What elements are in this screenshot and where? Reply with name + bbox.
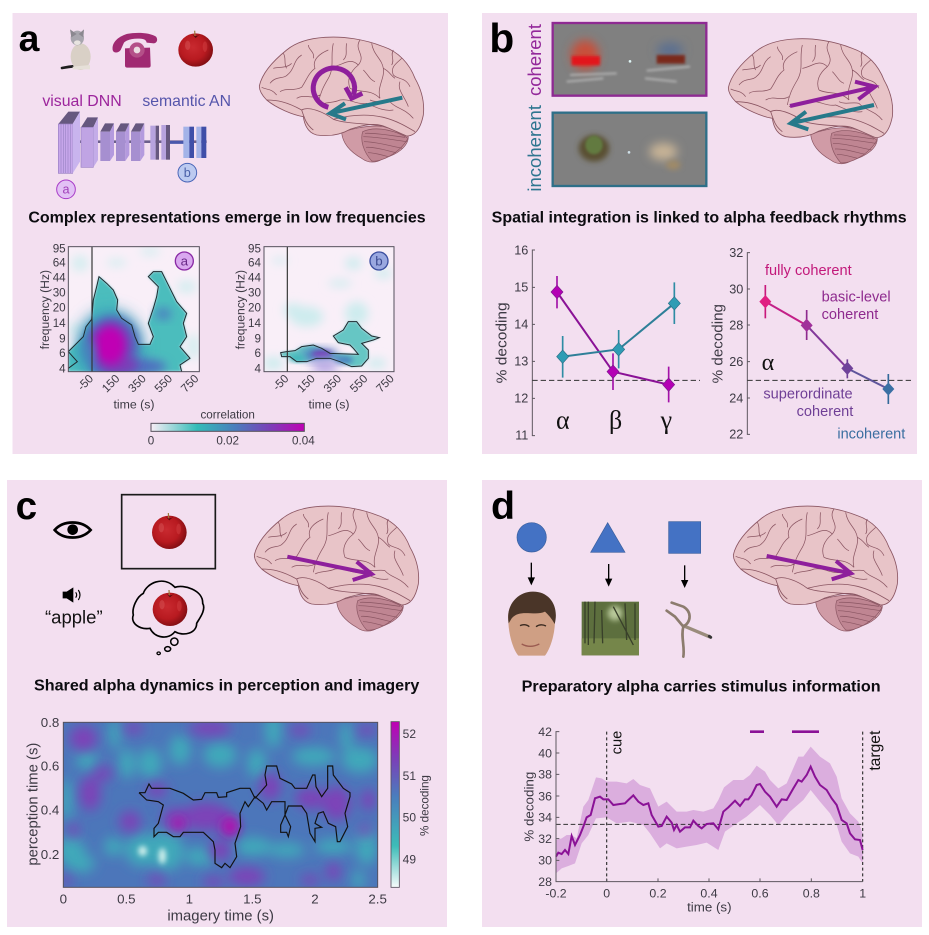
coherent stimulus image: [553, 23, 706, 96]
badge a: [57, 180, 75, 199]
chart: coherence levels: α: [762, 350, 775, 376]
chart: frequency bands: 16: [514, 243, 528, 257]
colorbar: correlation: 0.02: [216, 434, 239, 447]
image: face: [508, 592, 556, 656]
line chart: decoding over time: target: [867, 730, 884, 771]
heatmap b: -50: [270, 372, 292, 393]
colorbar: % decoding: 50: [403, 810, 416, 824]
heatmap: temporal generalization: 0.8: [41, 715, 59, 730]
heatmap b: 750: [374, 372, 397, 395]
label: visual DNN: visual DNN: [42, 93, 122, 110]
brain with arrow: [254, 506, 419, 631]
network diagram: [58, 112, 207, 173]
chart: frequency bands: γ: [660, 405, 672, 434]
panel letter a: a: [19, 17, 40, 59]
colorbar: correlation: [148, 409, 315, 447]
chart: coherence levels: 22: [729, 428, 743, 442]
heatmap b: frequency (Hz): [233, 270, 247, 349]
heatmap b: 64: [248, 257, 262, 270]
line chart: decoding over time: [521, 725, 884, 915]
chart: frequency bands: % decoding: [494, 302, 511, 383]
heatmap a: a: [181, 253, 189, 268]
brain with arrow: [733, 506, 898, 631]
heatmap b: 350: [321, 372, 344, 395]
heatmap a: 750: [179, 372, 202, 395]
heatmap a: 95: [53, 242, 66, 255]
heatmap b: 150: [295, 372, 318, 395]
icon: triangle cue: [591, 523, 625, 552]
heatmap a: time (s): [113, 397, 155, 411]
heatmap: temporal generalization: 0.2: [41, 847, 59, 862]
heatmap a: 9: [59, 332, 66, 345]
heatmap: temporal generalization: 2: [311, 892, 319, 907]
colorbar: % decoding: [391, 722, 431, 887]
icon: eye: [55, 522, 91, 537]
heatmap b: 44: [248, 272, 262, 285]
panel d: preparatory alpha: [482, 480, 922, 927]
chart: frequency bands: 11: [515, 429, 528, 443]
line chart: decoding over time: 30: [538, 854, 552, 868]
chart: coherence levels: fully coherent: [765, 262, 852, 279]
heatmap a: [38, 242, 202, 411]
colorbar: correlation: correlation: [200, 409, 255, 422]
panel letter c: c: [16, 485, 37, 528]
arrows from cues to targets: [528, 563, 688, 588]
shaded error band: [556, 747, 863, 873]
chart: coherence levels: % decoding: [709, 304, 726, 383]
chart: frequency bands: [494, 243, 700, 443]
heatmap: temporal generalization: 0.6: [41, 759, 59, 774]
panel letter d: d: [491, 484, 515, 528]
heading: Shared alpha dynamics in perception and imagery: [34, 678, 419, 695]
chart: coherence levels: 28: [729, 318, 743, 332]
heatmap: temporal generalization: 0: [60, 892, 67, 907]
heatmap b: time (s): [308, 397, 350, 411]
line chart: decoding over time: -0.2: [545, 886, 567, 900]
line chart: decoding over time: cue: [610, 731, 626, 754]
incoherent stimulus image: [553, 113, 706, 186]
chart: coherence levels: [709, 246, 912, 442]
heatmap: temporal generalization: 0.4: [41, 803, 60, 818]
chart: frequency bands: α: [556, 405, 570, 434]
icon: apple: [178, 31, 213, 67]
heading: Complex representations emerge in low frequencies: [28, 210, 426, 227]
heatmap a: 150: [100, 372, 123, 395]
heatmap a: 44: [53, 272, 66, 285]
line chart: decoding over time: 28: [538, 875, 552, 889]
brain with bidirectional arrows: [728, 39, 893, 164]
brain with recurrent and feedback arrows: [259, 37, 424, 162]
line chart: decoding over time: time (s): [687, 900, 732, 915]
heatmap a: 30: [53, 287, 66, 300]
line chart: decoding over time: 36: [538, 789, 552, 803]
badge b: [178, 163, 197, 182]
line chart: decoding over time: 40: [538, 746, 552, 760]
chart: coherence levels: basic-level: [822, 290, 891, 306]
colorbar: % decoding: 52: [403, 727, 416, 741]
chart: frequency bands: 15: [514, 280, 528, 294]
line chart: decoding over time: 0: [603, 886, 610, 900]
thought cloud with apple: [133, 581, 204, 655]
chart: coherence levels: coherent: [822, 307, 878, 323]
line chart: decoding over time: 0.2: [649, 886, 667, 900]
mean decoding line: [556, 767, 863, 857]
chart: frequency bands: 12: [514, 391, 528, 405]
label: incoherent: incoherent: [524, 105, 545, 192]
label: coherent: coherent: [524, 24, 545, 96]
perception stimulus box: [122, 495, 215, 569]
image: forest: [582, 602, 639, 655]
chart: coherence levels: 30: [729, 282, 743, 296]
line chart: decoding over time: 34: [538, 811, 552, 825]
icon: square cue: [669, 522, 701, 553]
line chart: decoding over time: 42: [538, 725, 552, 739]
heatmap: temporal generalization: [25, 712, 387, 925]
heatmap b: 20: [248, 302, 262, 315]
icon: telephone: [113, 33, 157, 68]
heatmap b: 6: [255, 347, 261, 360]
chart: coherence levels: 32: [729, 246, 743, 260]
heatmap a: 20: [53, 302, 66, 315]
chart: coherence levels: 24: [729, 391, 743, 405]
line chart: decoding over time: 0.4: [700, 886, 718, 900]
heatmap b: 30: [248, 287, 262, 300]
heading: Spatial integration is linked to alpha feedback rhythms: [492, 209, 907, 226]
image: pliers: [667, 603, 711, 657]
line chart: decoding over time: 0.6: [751, 886, 769, 900]
chart: frequency bands: β: [609, 405, 622, 434]
heading: Preparatory alpha carries stimulus information: [522, 678, 881, 695]
heatmap b: 550: [348, 372, 371, 395]
panel c: perception and imagery: [7, 480, 447, 927]
colorbar: % decoding: 51: [403, 769, 416, 783]
heatmap b: [233, 242, 397, 411]
chart: coherence levels: incoherent: [837, 426, 905, 442]
badge b: b: [184, 166, 191, 180]
incoherent line: [557, 282, 680, 378]
heatmap b: 9: [255, 332, 261, 345]
chart: coherence levels: coherent: [797, 404, 853, 420]
icon: cat: [62, 29, 91, 70]
heatmap a: 350: [126, 372, 149, 395]
chart: coherence levels: superordinate: [763, 386, 853, 402]
colorbar: correlation: 0: [148, 434, 155, 447]
colorbar: % decoding: 49: [403, 852, 416, 866]
icon: circle cue: [517, 523, 546, 552]
badge a: a: [62, 183, 70, 197]
line chart: decoding over time: 32: [538, 832, 552, 846]
heatmap: temporal generalization: 2.5: [368, 892, 387, 907]
label: semantic AN: semantic AN: [142, 93, 231, 110]
heatmap: temporal generalization: perception time (s): [25, 743, 41, 866]
heatmap a: 4: [59, 362, 66, 375]
heatmap: temporal generalization: 1: [186, 892, 193, 907]
line chart: decoding over time: 0.8: [803, 886, 820, 900]
heatmap: temporal generalization: 0.5: [117, 892, 136, 907]
coherent line: [551, 276, 675, 402]
line chart: decoding over time: % decoding: [521, 772, 536, 842]
heatmap: temporal generalization: 1.5: [243, 892, 262, 907]
chart: coherence levels: 26: [729, 355, 743, 369]
heatmap a: -50: [75, 372, 96, 393]
line chart: decoding over time: 1: [859, 886, 866, 900]
colorbar: correlation: 0.04: [292, 434, 315, 447]
panel a: low frequencies: [12, 13, 448, 454]
heatmap b: b: [375, 253, 383, 268]
icon: speaker: [63, 587, 80, 603]
heatmap b: 14: [248, 317, 262, 330]
chart: frequency bands: 14: [514, 317, 528, 331]
heatmap a: 6: [59, 347, 66, 360]
heatmap a: frequency (Hz): [38, 270, 52, 349]
chart: frequency bands: 13: [514, 354, 528, 368]
label: apple: “apple”: [45, 606, 103, 627]
heatmap a: 14: [53, 317, 66, 330]
heatmap a: 550: [152, 372, 175, 395]
panel letter b: b: [489, 15, 514, 61]
panel b: spatial integration: [482, 13, 917, 454]
colorbar: % decoding: % decoding: [418, 775, 431, 836]
line chart: decoding over time: 38: [538, 768, 552, 782]
heatmap: temporal generalization: imagery time (s): [167, 909, 274, 925]
heatmap b: 4: [255, 362, 262, 375]
heatmap b: 95: [248, 242, 261, 255]
heatmap a: 64: [53, 257, 66, 270]
